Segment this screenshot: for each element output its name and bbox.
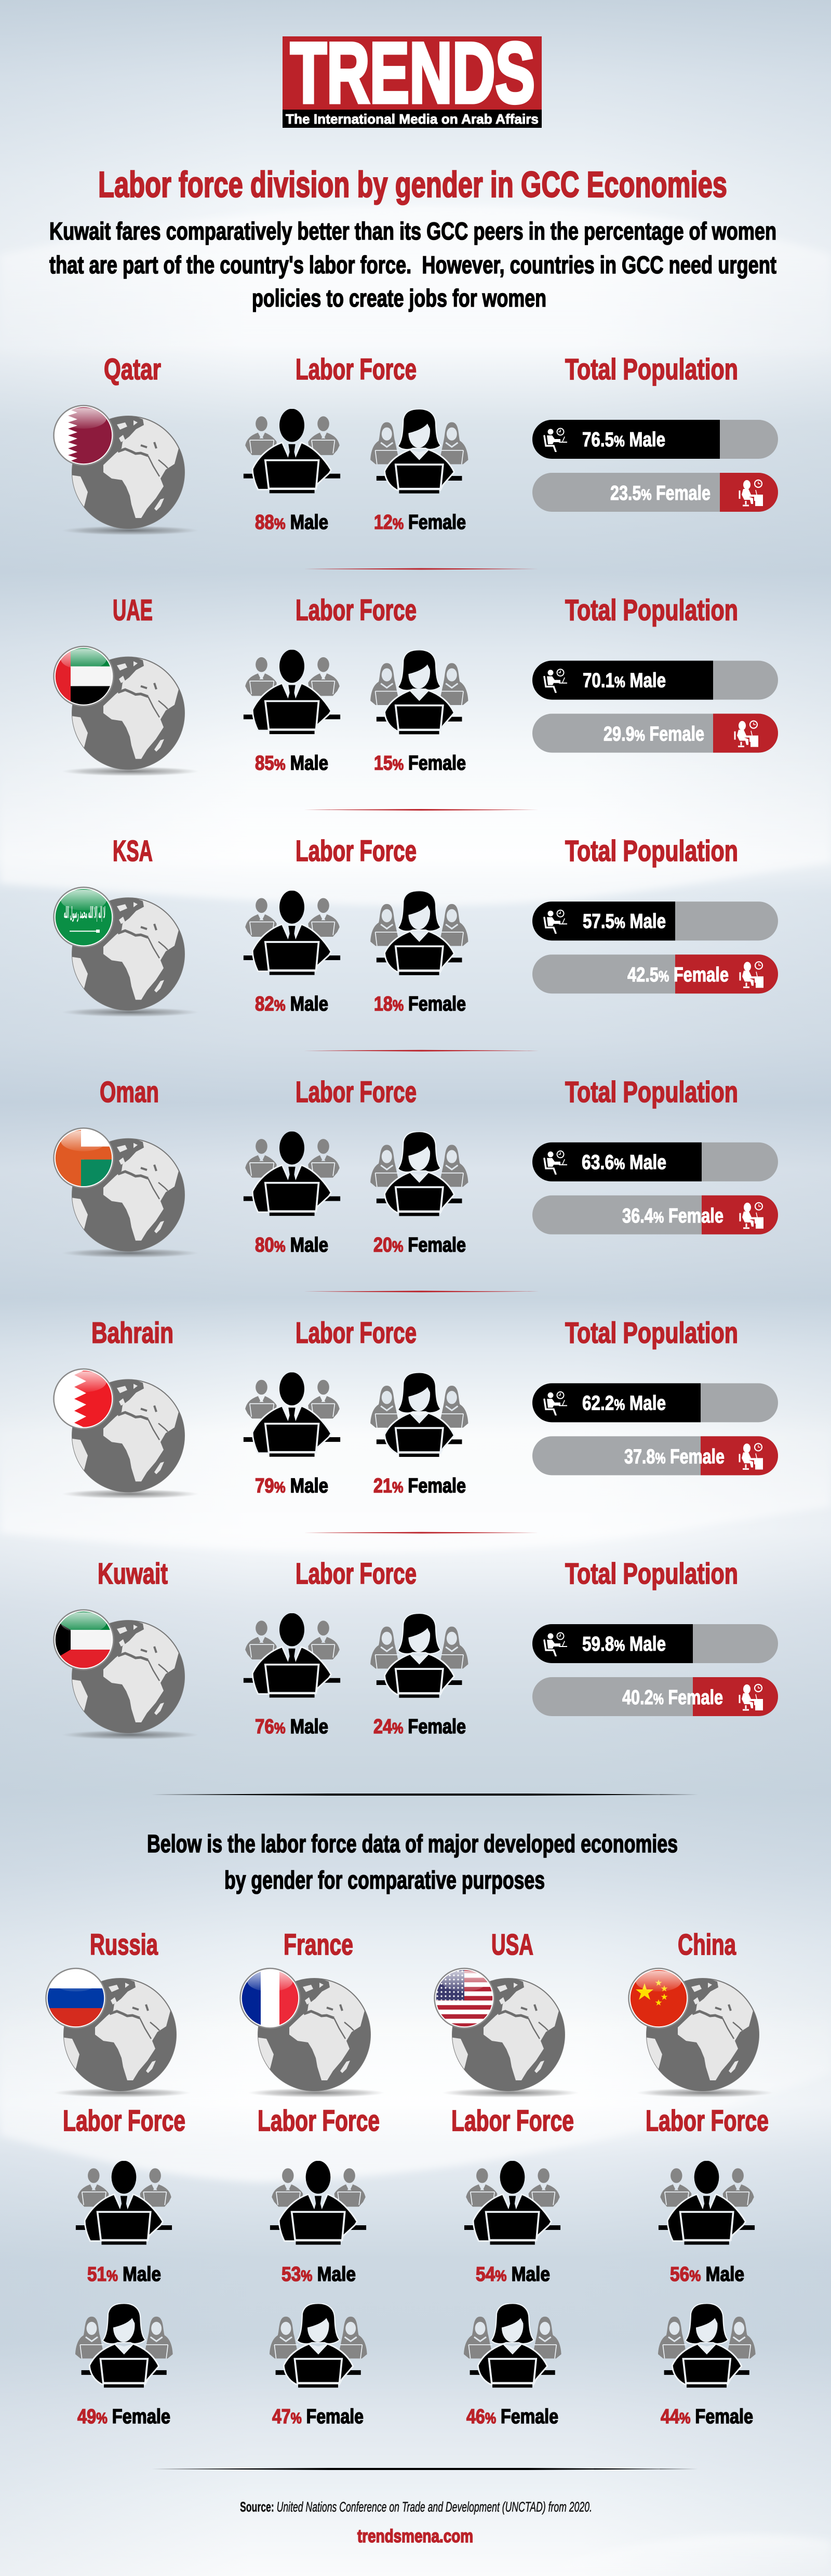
panel: Qatar: 88% Male [255, 511, 328, 534]
panel: UAE: UAE [113, 594, 153, 627]
panel: UAE: 15% Female [374, 752, 466, 775]
panel: France: Labor Force [258, 2104, 380, 2137]
icon: USA flag [434, 1968, 494, 2028]
panel: Qatar: Total Population [565, 353, 738, 386]
panel: USA: 54% Male [476, 2263, 550, 2286]
panel: Bahrain [54, 1316, 778, 1498]
panel: Kuwait: 59.8% Male [582, 1633, 666, 1655]
panel: Russia: 49% Female [77, 2406, 170, 2428]
panel: Russia: Russia [90, 1928, 158, 1961]
panel: Qatar [54, 353, 778, 535]
panel: China [628, 1928, 773, 2428]
icon: China flag [628, 1968, 689, 2028]
panel: Oman: 63.6% Male [582, 1151, 666, 1174]
panel: China: Labor Force [646, 2104, 769, 2137]
panel: Kuwait: 76% Male [255, 1716, 328, 1738]
panel: China: 56% Male [670, 2263, 744, 2286]
panel: KSA: Labor Force [296, 834, 417, 868]
icon: Russia flag [46, 1968, 106, 2028]
panel: Oman: 80% Male [255, 1234, 328, 1256]
icon: Bahrain flag [54, 1369, 113, 1429]
logo: TRENDS: TRENDS [290, 25, 535, 121]
panel: UAE: 70.1% Male [583, 670, 666, 692]
panel: Kuwait: Labor Force [296, 1557, 417, 1590]
panel: USA: Labor Force [451, 2104, 574, 2137]
panel: KSA: 82% Male [255, 993, 328, 1015]
panel: France: 47% Female [272, 2406, 364, 2428]
panel: KSA: Total Population [565, 834, 738, 868]
source note: Source: United Nations Conference on Trade and Development (UNCTAD) from 2020. [240, 2499, 592, 2515]
icon: UAE flag [54, 646, 113, 706]
icon: Saudi flag [54, 887, 113, 947]
panel: France: 53% Male [282, 2263, 356, 2286]
icon: France flag [240, 1968, 300, 2028]
intro text: policies to create jobs for women [252, 284, 546, 312]
panel: Bahrain: Total Population [565, 1316, 738, 1349]
panel: Bahrain: Labor Force [296, 1316, 417, 1349]
intro text [49, 217, 776, 312]
panel: Russia: Labor Force [63, 2104, 185, 2137]
panel: UAE: 29.9% Female [604, 723, 704, 746]
panel: USA: 46% Female [466, 2406, 558, 2428]
panel: Russia: 51% Male [87, 2263, 161, 2286]
panel: Bahrain: 62.2% Male [582, 1392, 666, 1414]
panel: UAE [54, 594, 778, 776]
panel: Bahrain: 79% Male [255, 1475, 328, 1497]
panel: Bahrain: 21% Female [373, 1475, 466, 1497]
panel: Oman: Oman [100, 1075, 159, 1109]
panel: KSA: لا إله إلا الله محمد رسول الله [64, 904, 105, 922]
panel: France: France [284, 1928, 353, 1961]
comparison intro text [147, 1830, 678, 1894]
panel: Qatar: Qatar [104, 353, 161, 386]
panel: UAE: Labor Force [296, 594, 417, 627]
comparison intro text: by gender for comparative purposes [224, 1867, 545, 1894]
panel: UAE: 85% Male [255, 752, 328, 775]
panel: China: 44% Female [661, 2406, 753, 2428]
panel: Kuwait [54, 1557, 778, 1740]
panel: Russia [46, 1928, 191, 2428]
panel: Qatar: Labor Force [296, 353, 417, 386]
website: trendsmena.com [357, 2526, 473, 2546]
panel: Bahrain: Bahrain [91, 1316, 173, 1349]
panel: KSA: KSA [113, 834, 153, 868]
panel: Kuwait: 24% Female [373, 1716, 466, 1738]
panel: Oman: 20% Female [373, 1234, 466, 1256]
panel: Kuwait: 40.2% Female [622, 1687, 723, 1709]
panel: Qatar: 12% Female [374, 511, 466, 534]
panel: USA: USA [491, 1928, 533, 1961]
panel: Oman: Total Population [565, 1075, 738, 1109]
panel: USA [434, 1928, 579, 2428]
panel: Qatar: 23.5% Female [610, 482, 711, 504]
panel: Oman: Labor Force [296, 1075, 417, 1109]
icon: Qatar flag [54, 405, 113, 466]
logo: TRENDS [283, 25, 542, 128]
panel: UAE: Total Population [565, 594, 738, 627]
panel: Kuwait: Kuwait [98, 1557, 168, 1590]
panel: KSA [54, 834, 778, 1017]
logo: TRENDS: The International Media on Arab Affairs [286, 111, 539, 127]
panel: Kuwait: Total Population [565, 1557, 738, 1590]
panel: Qatar: 76.5% Male [582, 429, 665, 451]
panel: Oman [54, 1075, 778, 1258]
panel: China: China [678, 1928, 736, 1961]
icon: Kuwait flag [54, 1610, 113, 1670]
panel: Bahrain: 37.8% Female [624, 1445, 725, 1468]
panel: KSA: 57.5% Male [583, 910, 666, 933]
panel: KSA: 18% Female [374, 993, 466, 1015]
panel: France [240, 1928, 385, 2428]
panel: KSA: 42.5% Female [627, 964, 729, 986]
panel: Oman: 36.4% Female [622, 1205, 723, 1227]
icon: Oman flag [54, 1128, 113, 1188]
